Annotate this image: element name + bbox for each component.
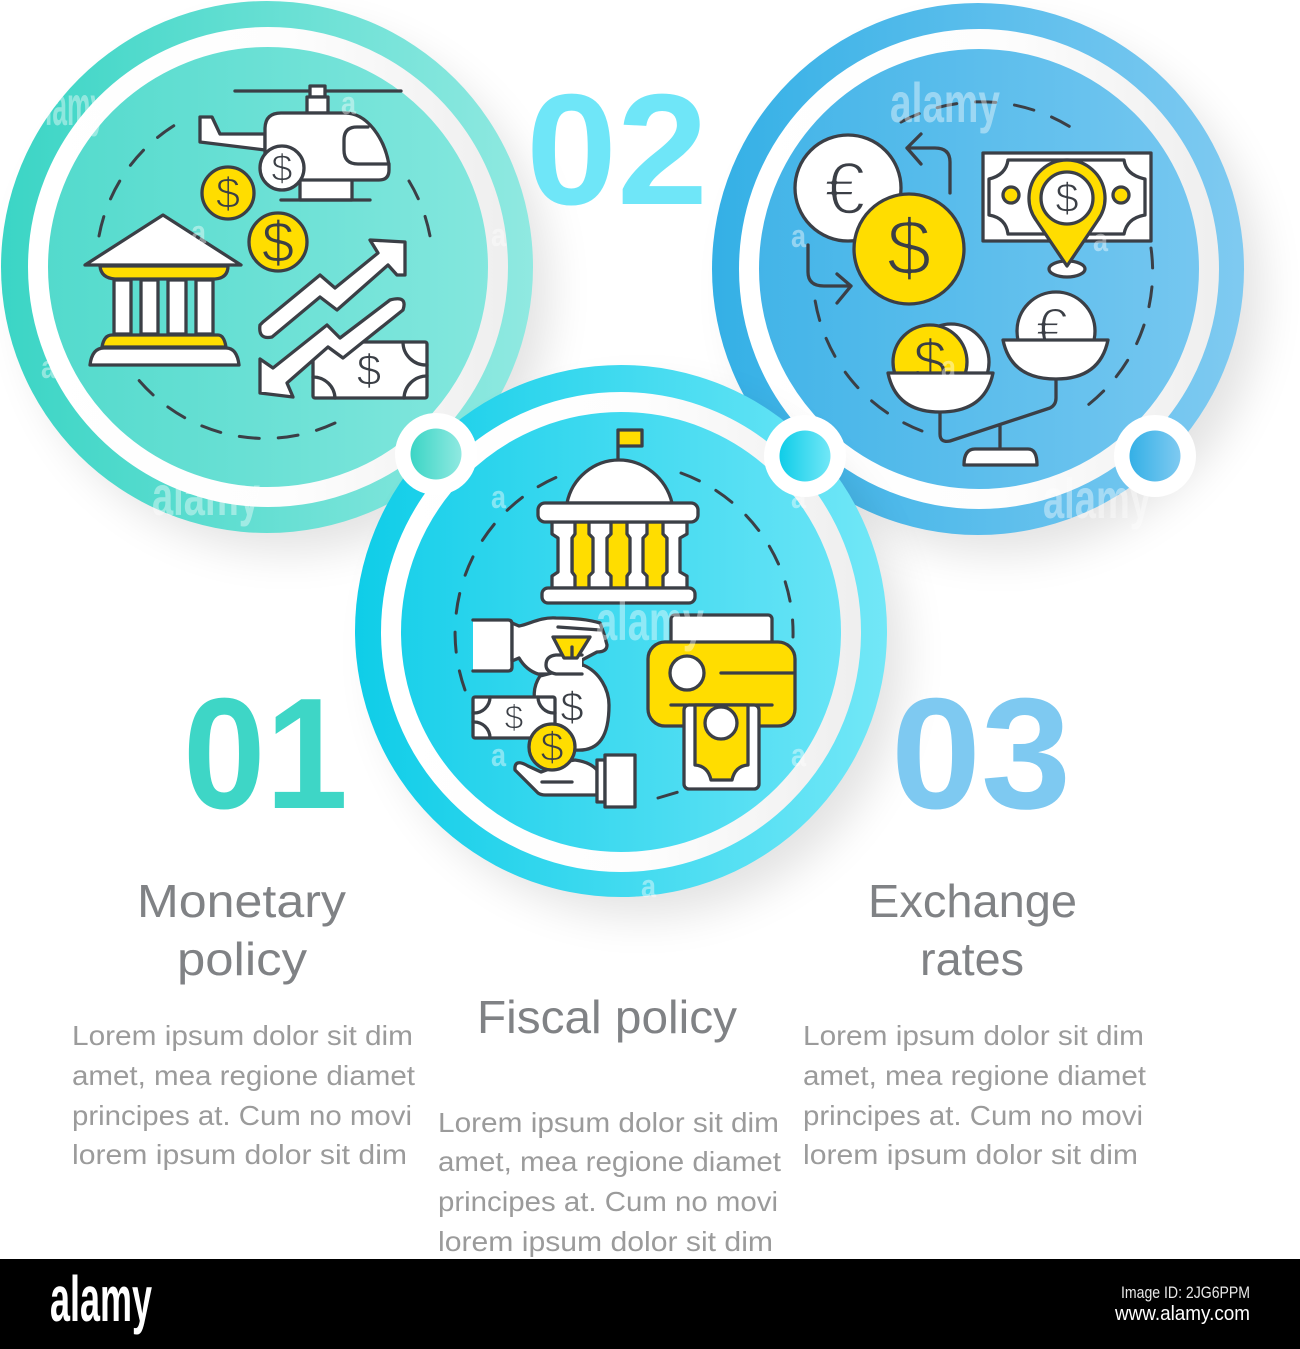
icon: money bag and hands: $ [540,723,564,770]
text block: monetary policy: Lorem ipsum dolor sit dim [72,1020,413,1051]
icon: monetary policy illustration [85,86,430,438]
icon: euro coin: € [824,147,866,230]
icon: balance scale: $ [913,328,947,395]
icon: banknote [983,153,1151,241]
watermarks: alamy [596,589,704,652]
watermarks: a [491,479,506,515]
icon: cash bill [313,342,427,398]
watermarks: a [1093,222,1108,258]
arrow: dollar forward [808,245,851,303]
watermarks: a [791,737,806,773]
text block: monetary policy: lorem ipsum dolor sit dim [72,1139,407,1170]
text block: fiscal policy [438,1107,781,1257]
watermarks: a [191,214,206,250]
footer url: www.alamy.com [1114,1303,1250,1325]
text block: fiscal policy: amet, mea regione diamet [438,1146,781,1177]
watermarks: lamy [45,74,105,137]
footer bar [0,1259,1300,1349]
heading: exchange rates [868,875,1077,985]
footer image id: Image ID: 2JG6PPM [1121,1283,1250,1302]
connector dot: teal [395,413,477,495]
arrow: rising [260,240,405,338]
footer logo: alamy [50,1263,152,1335]
dashed ring: exchange [815,102,1153,431]
arrow: falling [260,299,404,397]
dashed ring: fiscal [455,473,793,798]
panel: fiscal policy circle [355,365,904,916]
icon: exchange rates illustration [795,102,1153,465]
watermarks: a [491,217,506,253]
watermarks: a [791,218,806,254]
text block: exchange rates [803,1020,1146,1170]
icon: money bag and hands [473,618,635,807]
text block: fiscal policy: principes at. Cum no movi [438,1186,778,1217]
icon: location pin: $ [1055,174,1079,221]
heading: exchange rates: Exchange [868,875,1077,927]
icon: fiscal policy illustration [455,430,795,807]
text block: fiscal policy: Lorem ipsum dolor sit dim [438,1107,779,1138]
icon: balance scale: € [1036,297,1068,362]
icon: yellow coin small: $ [216,169,240,218]
icon: money bag and hands: $ [560,683,584,730]
icon: yellow coin large: $ [262,210,294,275]
watermarks: alamy [1043,467,1151,530]
icon: dollar coin: $ [887,203,931,292]
connector dot: cyan [764,415,846,497]
connector dot: blue [1114,415,1196,497]
watermarks: a [341,85,356,121]
icon: yellow coin large [249,210,307,275]
watermarks: a [641,868,656,904]
icon: dollar coin [854,194,964,304]
number 01: 01 [183,666,348,842]
text block: exchange rates: principes at. Cum no movi [803,1100,1143,1131]
heading: exchange rates: rates [920,933,1024,985]
text block: monetary policy: amet, mea regione diamet [72,1060,415,1091]
heading: monetary policy [137,875,346,985]
number 03: 03 [891,666,1071,842]
arrow: euro return [907,134,950,193]
panel: exchange rates circle [712,3,1262,554]
icon: balance scale [888,292,1108,465]
icon: yellow coin small [202,167,254,219]
text block: exchange rates: amet, mea regione diamet [803,1060,1146,1091]
dashed ring: monetary [99,125,430,438]
icon: helicopter [200,86,401,200]
text block: exchange rates: lorem ipsum dolor sit dim [803,1139,1138,1170]
icon: euro coin [795,135,901,241]
text block: monetary policy: principes at. Cum no movi [72,1100,412,1131]
heading: monetary policy: policy [177,933,307,985]
watermarks: a [941,349,956,385]
icon: government building [538,430,698,603]
icon: cash bill: $ [357,346,381,395]
watermarks: a [491,737,506,773]
icon: money bag and hands: $ [505,699,524,737]
text block: exchange rates: Lorem ipsum dolor sit dim [803,1020,1144,1051]
icon: bank building [85,215,241,365]
watermarks: alamy [890,71,1000,134]
number 02: 02 [526,62,708,238]
watermarks: alamy [152,464,260,527]
icon: location pin [1029,160,1105,277]
watermarks: a [791,479,806,515]
heading: fiscal policy: Fiscal policy [477,991,737,1043]
watermarks [41,71,1151,904]
text block: monetary policy [72,1020,415,1170]
panel: monetary policy circle [1,1,550,552]
heading: monetary policy: Monetary [137,875,346,927]
icon: helicopter: $ [271,148,293,190]
icon: card printer [648,615,795,789]
watermarks: a [41,349,56,385]
text block: fiscal policy: lorem ipsum dolor sit dim [438,1226,773,1257]
